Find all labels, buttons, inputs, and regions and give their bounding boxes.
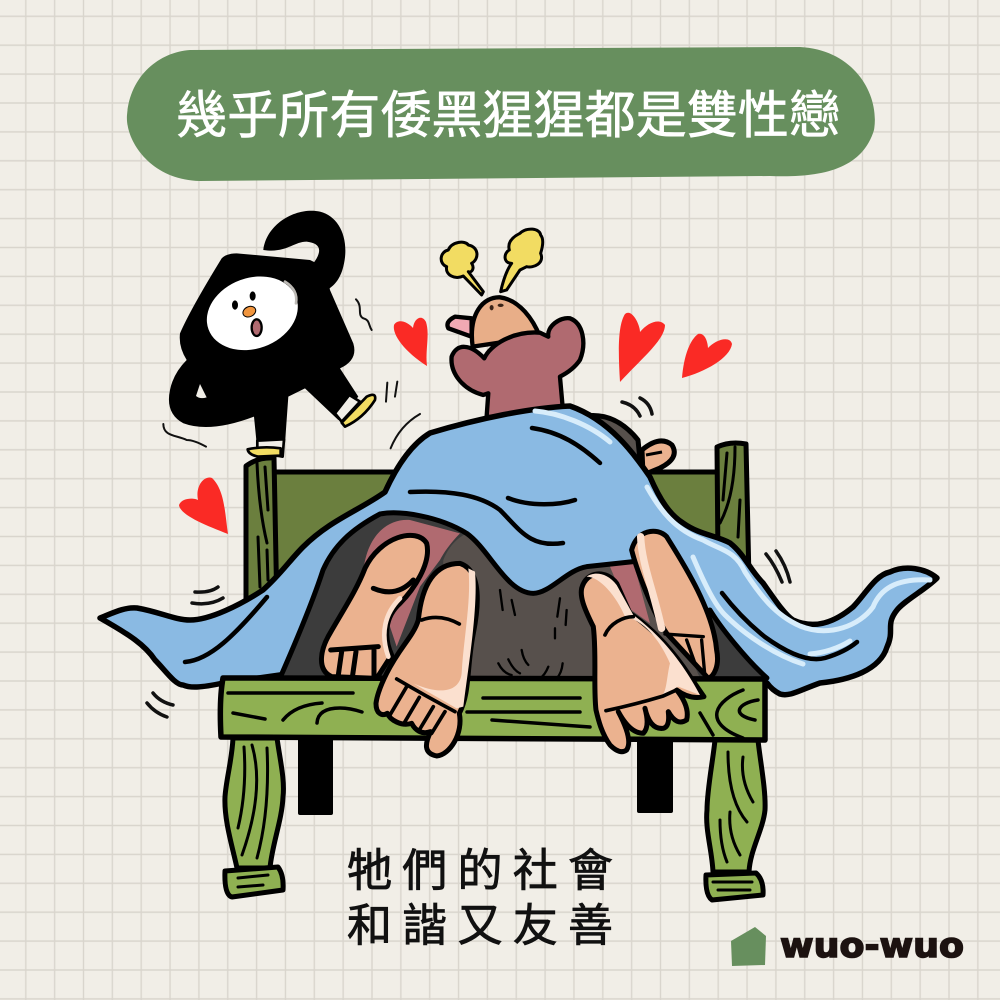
body bbox=[169, 253, 358, 443]
right cuff bbox=[706, 873, 763, 900]
rail wood grain bbox=[228, 690, 758, 738]
monkey tongue bbox=[447, 317, 472, 337]
back bed legs bbox=[298, 735, 673, 815]
left leg bbox=[225, 738, 283, 868]
hearts bbox=[179, 313, 732, 534]
right leg bbox=[707, 740, 765, 872]
beak bbox=[241, 304, 257, 319]
front left foot details bbox=[390, 617, 459, 733]
front right foot highlight bbox=[587, 574, 700, 695]
headboard panel bbox=[272, 472, 722, 602]
front right foot bbox=[581, 574, 704, 752]
banner pill bbox=[127, 47, 875, 181]
fur strokes bbox=[498, 590, 567, 678]
left back foot highlight bbox=[384, 598, 400, 657]
blanket highlights bbox=[535, 411, 930, 664]
logo bbox=[731, 926, 964, 966]
monkey body bbox=[451, 318, 583, 420]
feet bbox=[321, 531, 718, 756]
left post bbox=[246, 458, 277, 612]
front left foot highlight bbox=[413, 568, 476, 708]
heart 1 bbox=[394, 318, 428, 366]
dark fur opening bbox=[280, 513, 767, 678]
left cuff bbox=[225, 867, 283, 897]
motion squiggles bbox=[163, 299, 420, 448]
face bbox=[196, 264, 308, 362]
steam puff right bbox=[501, 229, 543, 292]
caption line 2: 和諧又友善 bbox=[347, 900, 613, 951]
motion marks bbox=[147, 398, 790, 717]
blanket fill bbox=[100, 406, 937, 695]
front bed rail bbox=[220, 678, 765, 740]
logo wordmark: wuo-wuo bbox=[780, 926, 964, 966]
eyes bbox=[232, 291, 256, 310]
heart 3 bbox=[682, 334, 732, 378]
kicking sock and shoe bbox=[335, 395, 375, 427]
rail board bbox=[220, 678, 765, 740]
heart 2 bbox=[619, 313, 665, 382]
tail bbox=[263, 211, 345, 290]
penguin in black monkey suit bbox=[163, 211, 420, 457]
title text: 幾乎所有倭黑猩猩都是雙性戀 bbox=[176, 87, 840, 144]
logo house icon bbox=[731, 927, 766, 966]
left back foot bbox=[321, 535, 427, 678]
mouth bbox=[252, 319, 262, 336]
heart 4 bbox=[179, 477, 228, 534]
face shade bbox=[285, 282, 296, 303]
left back foot details bbox=[331, 580, 413, 677]
maroon skin left bbox=[363, 520, 460, 647]
opening outline bbox=[280, 513, 767, 678]
caption line 1: 牠們的社會 bbox=[347, 845, 613, 896]
blanket bbox=[100, 406, 937, 695]
right back foot highlight bbox=[641, 537, 662, 628]
arm gap bbox=[196, 384, 207, 398]
dark bonobo head behind blanket bbox=[570, 416, 674, 480]
title banner bbox=[127, 47, 875, 181]
front left foot bbox=[376, 563, 477, 756]
monkey nostrils bbox=[490, 304, 504, 310]
under-blanket opening with fur bbox=[280, 513, 767, 678]
ear bbox=[642, 441, 674, 475]
right post bbox=[717, 443, 749, 580]
front right foot details bbox=[605, 617, 677, 711]
front bed legs bbox=[225, 738, 765, 900]
bed back: headboard and posts bbox=[246, 443, 749, 612]
monkey muzzle bbox=[472, 297, 540, 347]
steam puff left bbox=[441, 229, 543, 295]
right back foot bbox=[632, 531, 718, 678]
caption text bbox=[347, 845, 613, 951]
head bbox=[570, 416, 642, 480]
leg grain bbox=[238, 745, 753, 890]
centre fur bbox=[440, 533, 700, 678]
right back foot details bbox=[665, 634, 705, 677]
monkey behind blanket bbox=[441, 229, 583, 420]
post wood grain bbox=[257, 447, 740, 587]
blanket folds bbox=[185, 428, 857, 662]
standing sock and shoe bbox=[248, 439, 284, 457]
maroon skin right bbox=[610, 562, 650, 623]
